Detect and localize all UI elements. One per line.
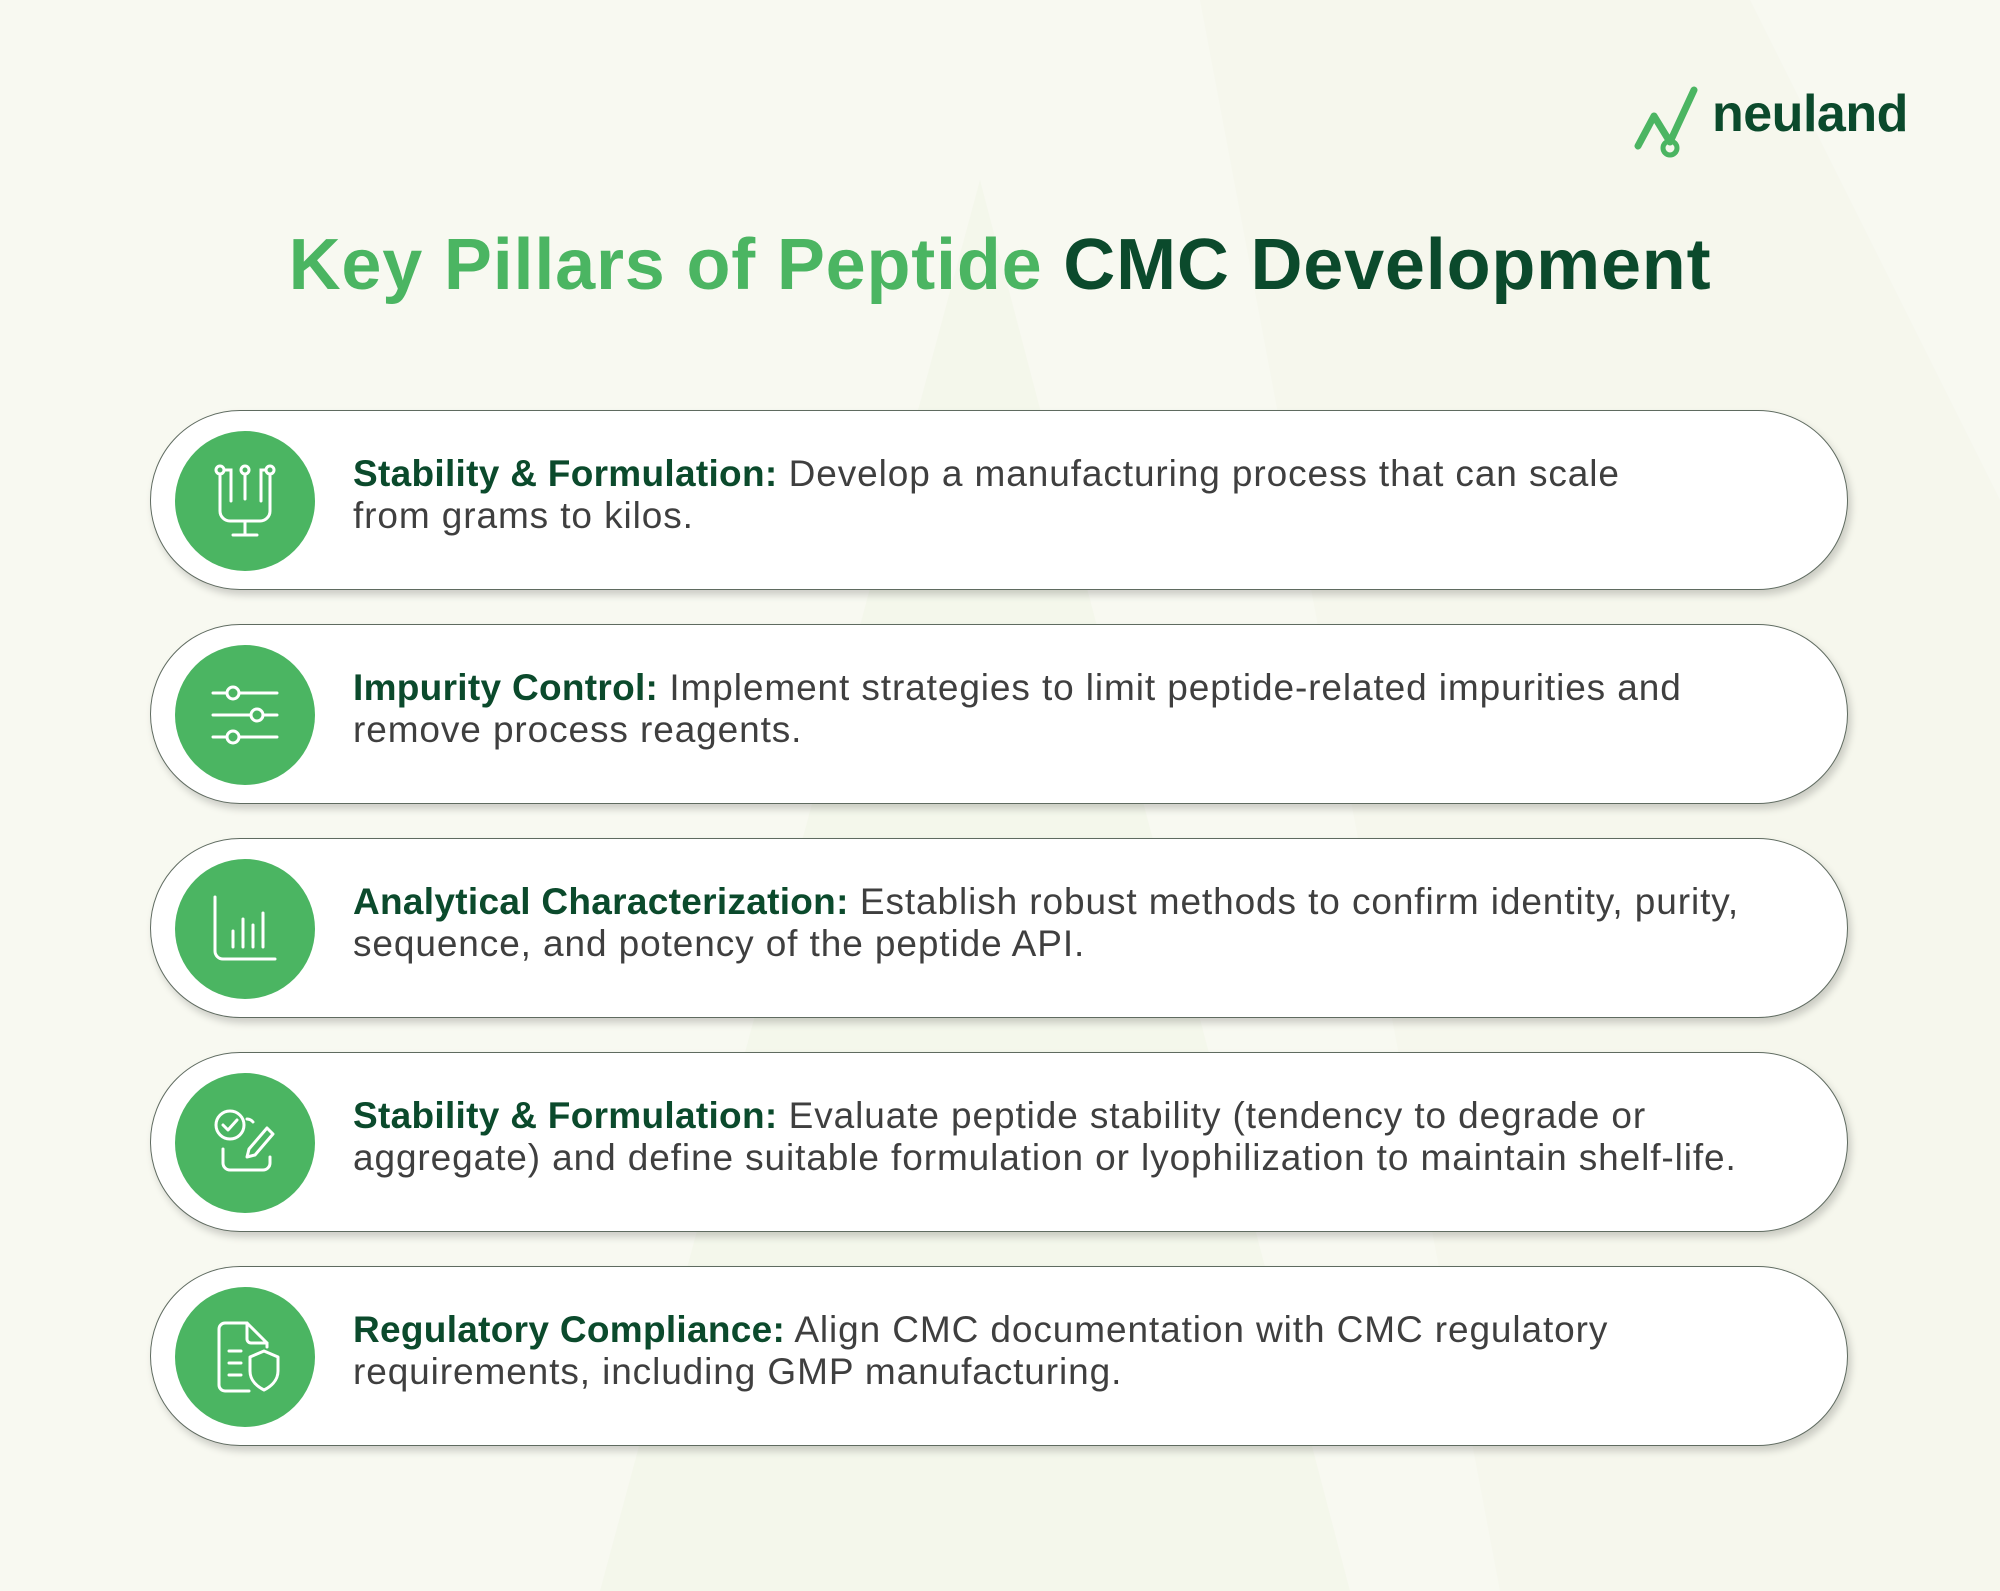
icon: document shield	[175, 1287, 315, 1427]
icon: monitor circuit	[175, 431, 315, 571]
text	[353, 453, 1620, 536]
panel: pillar 2	[150, 624, 1848, 804]
text: Impurity Control: Implement strategies to limit peptide-related impurities and	[353, 667, 1682, 708]
text: Analytical Characterization: Establish robust methods to confirm identity, purity,	[353, 881, 1739, 922]
panel: pillar 5	[150, 1266, 1848, 1446]
text	[353, 1309, 1608, 1392]
icon: sliders	[175, 645, 315, 785]
text	[353, 1095, 1737, 1178]
title: Key Pillars of Peptide CMC Development	[289, 225, 1711, 305]
text	[353, 881, 1739, 964]
text: from grams to kilos.	[353, 495, 694, 536]
panel: pillar 4	[150, 1052, 1848, 1232]
logo	[1634, 85, 1908, 158]
text: Regulatory Compliance: Align CMC documentation with CMC regulatory	[353, 1309, 1608, 1350]
text: Stability & Formulation: Develop a manufacturing process that can scale	[353, 453, 1620, 494]
text: sequence, and potency of the peptide API.	[353, 923, 1085, 964]
logo: neuland	[1712, 85, 1908, 143]
text: requirements, including GMP manufacturing.	[353, 1351, 1122, 1392]
icon: bar chart	[175, 859, 315, 999]
panel: pillar 1	[150, 410, 1848, 590]
text: aggregate) and define suitable formulation or lyophilization to maintain shelf-life.	[353, 1137, 1737, 1178]
panel: pillar 3	[150, 838, 1848, 1018]
icon: check and pencil	[175, 1073, 315, 1213]
text: Stability & Formulation: Evaluate peptide stability (tendency to degrade or	[353, 1095, 1646, 1136]
text: remove process reagents.	[353, 709, 802, 750]
text	[353, 667, 1682, 750]
